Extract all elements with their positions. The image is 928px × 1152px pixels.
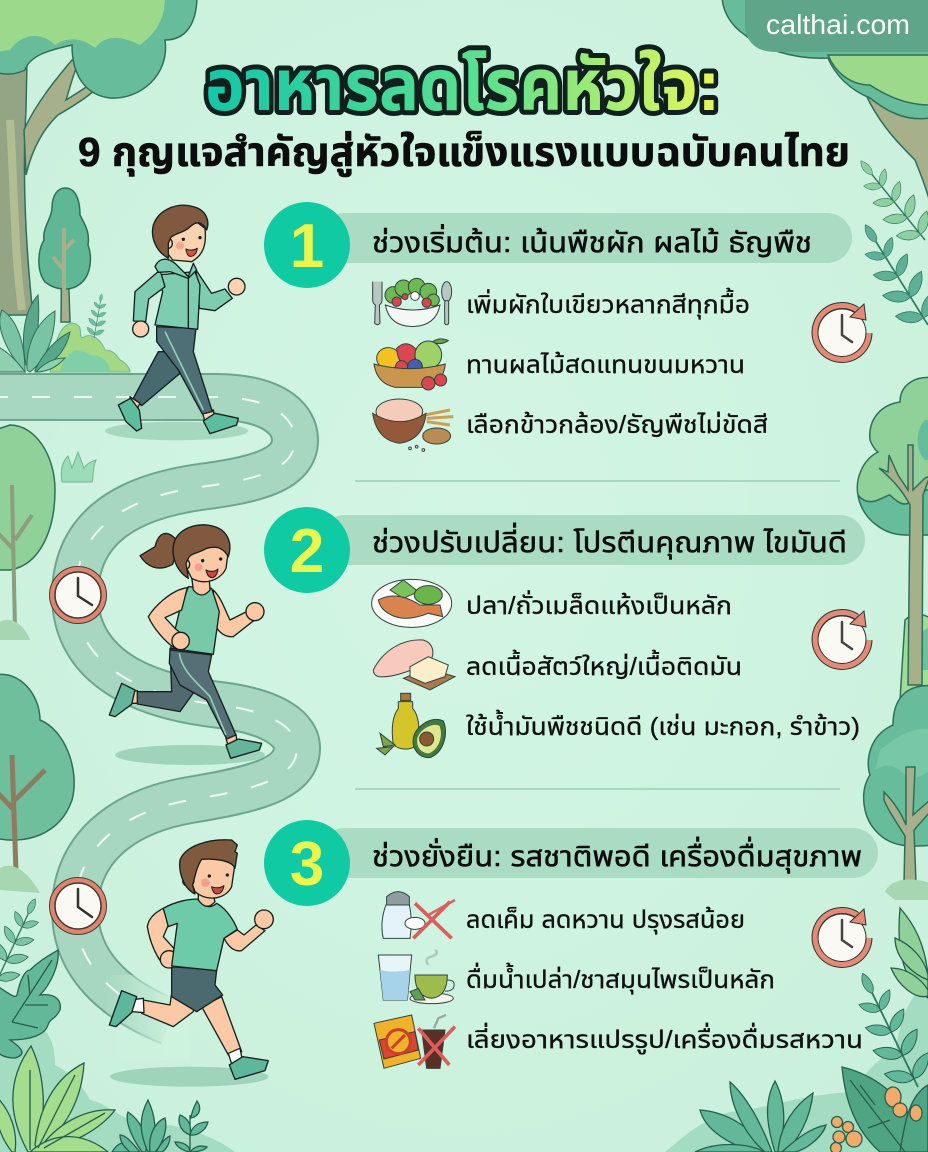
icon: fish plate (372, 579, 452, 627)
section 1 heading: ช่วงเริ่มต้น: เน้นพืชผัก ผลไม้ ธัญพืช (372, 224, 812, 259)
runner 3: running man in t-shirt (109, 840, 273, 1087)
section 1 item 3 text: เลือกข้าวกล้อง/ธัญพืชไม่ขัดสี (466, 411, 768, 439)
runner 2: jogging woman in tank top (109, 525, 265, 765)
section 1 number badge (264, 202, 350, 288)
section 3 item 3 text: เลี่ยงอาหารแปรรูป/เครื่องดื่มรสหวาน (466, 1022, 863, 1055)
section 2 heading: ช่วงปรับเปลี่ยน: โปรตีนคุณภาพ ไขมันดี (372, 522, 847, 559)
section 3 heading: ช่วงยั่งยืน: รสชาติพอดี เครื่องดื่มสุขภาพ (372, 836, 862, 873)
logo badge: calthai.com (745, 0, 928, 52)
clock: road middle (50, 566, 106, 624)
section 1 number badge: 1 (290, 212, 324, 281)
section 2 number badge: 2 (290, 517, 324, 586)
fern: upper right (843, 147, 928, 339)
tree: top left (0, 0, 197, 315)
section 2 number badge (264, 507, 350, 593)
section 1 item 2 text: ทานผลไม้สดแทนขนมหวาน (466, 351, 745, 379)
road (0, 397, 297, 1060)
section 1 header pill (320, 213, 852, 263)
icon: water glass and herbal tea (378, 950, 454, 1004)
tree: left middle (0, 425, 55, 640)
divider (355, 788, 840, 790)
icon: chicken breast and tofu (373, 640, 455, 690)
section 3 (264, 820, 878, 1068)
section 2 (264, 507, 869, 758)
icon: salt and no-sugar (382, 892, 455, 938)
section 3 header pill (320, 828, 878, 878)
icon: salad bowl (373, 278, 452, 327)
section 1 (264, 202, 869, 451)
divider (355, 480, 840, 482)
section 3 number badge (264, 820, 350, 906)
icon: clock with arrow (815, 909, 869, 964)
section 3 item 2 text: ดื่มน้ำเปล่า/ชาสมุนไพรเป็นหลัก (466, 962, 775, 995)
title: อาหารลดโรคหัวใจ: (205, 46, 720, 126)
section 2 item 3 text: ใช้น้ำมันพืชชนิดดี (เช่น มะกอก, รำข้าว) (466, 709, 860, 741)
section 3 item 1 text: ลดเค็ม ลดหวาน ปรุงรสน้อย (466, 906, 745, 935)
section 3 number badge: 3 (290, 830, 324, 899)
tree: right lower (864, 686, 928, 900)
bushes: upper left (0, 292, 130, 372)
tree: small upper left (39, 188, 90, 322)
section 2 item 2 text: ลดเนื้อสัตว์ใหญ่/เนื้อติดมัน (466, 649, 742, 681)
section 1 item 1 text: เพิ่มผักใบเขียวหลากสีทุกมื้อ (466, 287, 750, 320)
icon: clock with arrow (815, 611, 869, 666)
tree: left lower (0, 674, 74, 893)
section 2 header pill (320, 515, 865, 565)
icon: snack bag and soda crossed out (374, 1015, 455, 1068)
tree: right middle (857, 377, 928, 700)
icon: fruit basket (374, 339, 448, 390)
tree: top right (722, 0, 928, 235)
foliage: lower left (0, 890, 235, 1152)
foliage: lower right (665, 908, 928, 1152)
subtitle: 9 กุญแจสำคัญสู่หัวใจแข็งแรงแบบฉบับคนไทย (78, 129, 850, 177)
icon: oil bottle and avocado (377, 693, 445, 758)
logo badge: calthai.com: calthai.com (766, 9, 910, 40)
grass tuft (61, 452, 96, 482)
section 2 item 1 text: ปลา/ถั่วเมล็ดแห้งเป็นหลัก (466, 589, 732, 620)
clock: road lower (50, 878, 106, 934)
icon: clock with arrow (815, 304, 869, 359)
runner 1: walking man in hoodie (105, 205, 248, 440)
icon: rice and grains (373, 399, 453, 451)
